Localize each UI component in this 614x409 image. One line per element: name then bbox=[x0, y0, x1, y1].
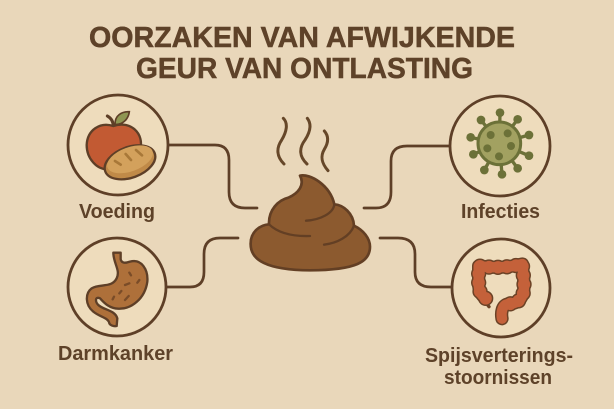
circle bbox=[452, 239, 550, 337]
panel: spijsverteringsstoornissen bbox=[425, 239, 573, 389]
label: Voeding bbox=[79, 201, 155, 223]
panel: darmkanker bbox=[58, 238, 173, 365]
label: Spijsverterings- bbox=[425, 345, 573, 367]
connector: infecties bbox=[364, 146, 450, 208]
icon: stool with odour lines bbox=[251, 118, 370, 270]
title bbox=[89, 22, 515, 85]
label bbox=[425, 345, 573, 389]
stool bbox=[251, 175, 370, 270]
title: OORZAKEN VAN AFWIJKENDE bbox=[89, 22, 515, 54]
icon: virus bbox=[466, 108, 533, 179]
label: Infecties bbox=[461, 201, 540, 223]
panel: infecties bbox=[450, 96, 550, 223]
connector: voeding bbox=[168, 145, 257, 208]
odour lines bbox=[278, 118, 328, 171]
title: GEUR VAN ONTLASTING bbox=[136, 53, 473, 85]
label: Darmkanker bbox=[58, 343, 173, 365]
connector: spijsverteringsstoornissen bbox=[380, 238, 452, 287]
label: stoornissen bbox=[444, 367, 552, 389]
circle bbox=[450, 96, 550, 196]
circle bbox=[68, 95, 168, 195]
icon: colon bbox=[479, 264, 524, 319]
panel: voeding bbox=[68, 95, 168, 223]
icon: apple and bread bbox=[87, 112, 160, 186]
connector: darmkanker bbox=[167, 238, 238, 287]
circle bbox=[68, 238, 166, 336]
icon: stomach bbox=[87, 253, 147, 326]
